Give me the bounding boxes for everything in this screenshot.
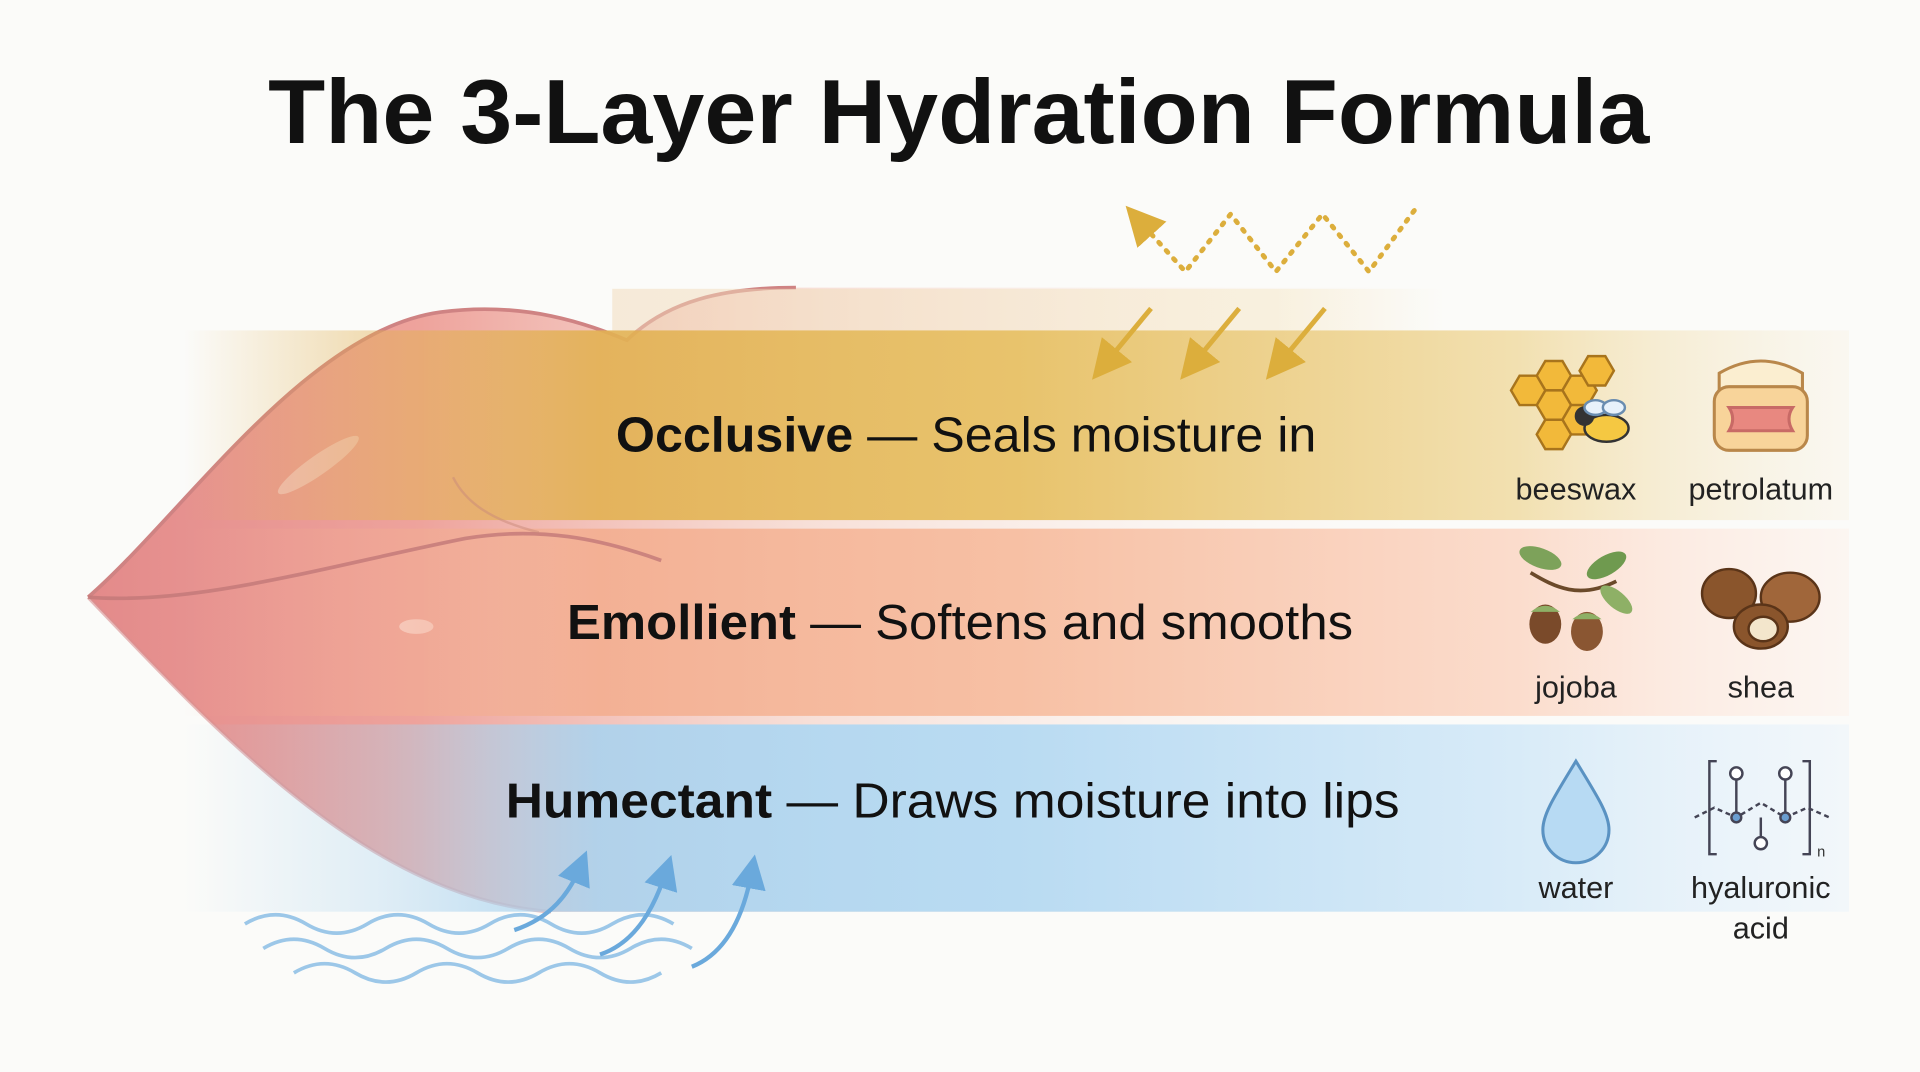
icon: water drop: [1543, 761, 1609, 863]
icon: evaporation zigzag arrow: [1139, 210, 1414, 272]
text: n: [1817, 845, 1825, 861]
label: jojoba: jojoba: [1534, 671, 1618, 705]
icon: water waves: [245, 915, 692, 982]
label: beeswax: beeswax: [1516, 472, 1636, 506]
panel: emollient band: [184, 529, 1849, 716]
heading: humectant: Humectant — Draws moisture into lips: [506, 774, 1400, 828]
heading: occlusive: Occlusive — Seals moisture in: [616, 409, 1316, 463]
panel: occlusive band: [184, 330, 1849, 520]
icon: beeswax: [1511, 356, 1629, 449]
icon: petrolatum jar: [1714, 361, 1807, 450]
icon: drawing arrows up: [514, 866, 752, 967]
panel: humectant band: [184, 724, 1849, 912]
label: petrolatum: petrolatum: [1689, 472, 1833, 506]
label: water: water: [1538, 871, 1613, 905]
lip illustration: [88, 288, 1420, 912]
lip line: [88, 477, 661, 598]
label: shea: shea: [1728, 671, 1795, 705]
icon: hyaluronic acid molecule: [1695, 761, 1829, 854]
heading: emollient: Emollient — Softens and smooths: [567, 596, 1353, 650]
upper lip light band: [612, 289, 1445, 330]
label: hyaluronic acid: acid: [1733, 912, 1789, 946]
label: hyaluronic acid: hyaluronic: [1691, 871, 1831, 905]
icon: jojoba: [1516, 541, 1637, 651]
icon: sealing arrows down: [1104, 308, 1325, 365]
title: The 3-Layer Hydration Formula: [268, 62, 1650, 163]
icon: shea nuts: [1702, 569, 1820, 649]
